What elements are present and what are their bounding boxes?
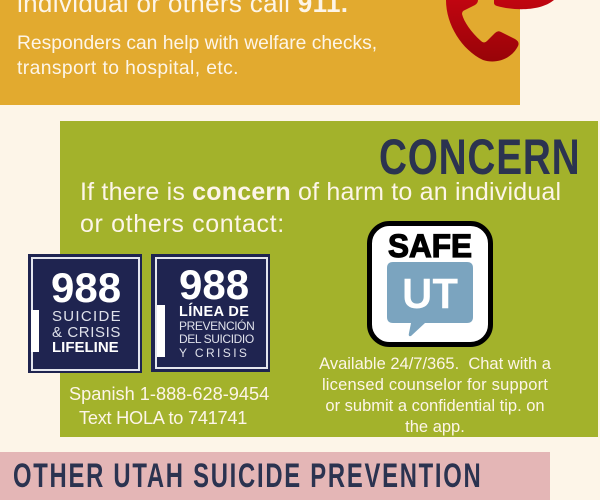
panel: other utah resources: [0, 452, 550, 500]
spanish contact text: Spanish 1-888-628-9454: [69, 384, 269, 404]
logo: 988 linea de prevencion: PREVENCIÓN: [179, 319, 254, 333]
logo: 988 suicide and crisis lifeline: 988: [51, 264, 121, 311]
safe ut description: or submit a confidential tip. on: [325, 396, 545, 414]
concern instructions: If there is concern of harm to an individual: [80, 178, 561, 206]
logo: safe ut: UT: [402, 270, 458, 318]
logo: 988 linea de prevencion: 988: [179, 261, 249, 308]
logo: 988 linea de prevencion: [151, 254, 270, 372]
icon: red telephone: [446, 0, 554, 62]
concern instructions: [80, 178, 561, 238]
spanish contact text: Text HOLA to 741741: [79, 408, 247, 428]
safe ut description: licensed counselor for support: [322, 376, 548, 394]
responders text: [17, 32, 377, 78]
logo: 988 suicide and crisis lifeline: [28, 254, 142, 373]
safe ut description: Available 24/7/365. Chat with a: [319, 354, 551, 372]
concern heading: CONCERN: [379, 129, 580, 185]
spanish contact text: [69, 384, 269, 428]
concern instructions: or others contact:: [80, 210, 285, 238]
logo: 988 suicide and crisis lifeline: & CRISIS: [52, 324, 121, 340]
logo: safe ut: SAFE: [388, 228, 472, 264]
safe ut description: the app.: [405, 418, 465, 436]
other resources heading: OTHER UTAH SUICIDE PREVENTION: [13, 457, 482, 495]
logo: 988 linea de prevencion: DEL SUICIDIO: [179, 332, 254, 346]
panel: concern: [60, 121, 598, 437]
logo: 988 suicide and crisis lifeline: SUICIDE: [52, 308, 122, 324]
logo: 988 linea de prevencion: LÍNEA DE: [179, 304, 249, 320]
safe ut description: [319, 354, 551, 436]
responders text: transport to hospital, etc.: [17, 58, 239, 78]
logo: 988 linea de prevencion: Y CRISIS: [179, 346, 249, 360]
logo: 988 suicide and crisis lifeline: LIFELINE: [52, 338, 119, 356]
logo: safe ut: [367, 221, 493, 347]
responders text: Responders can help with welfare checks,: [17, 32, 377, 54]
panel: emergency: [0, 0, 520, 105]
